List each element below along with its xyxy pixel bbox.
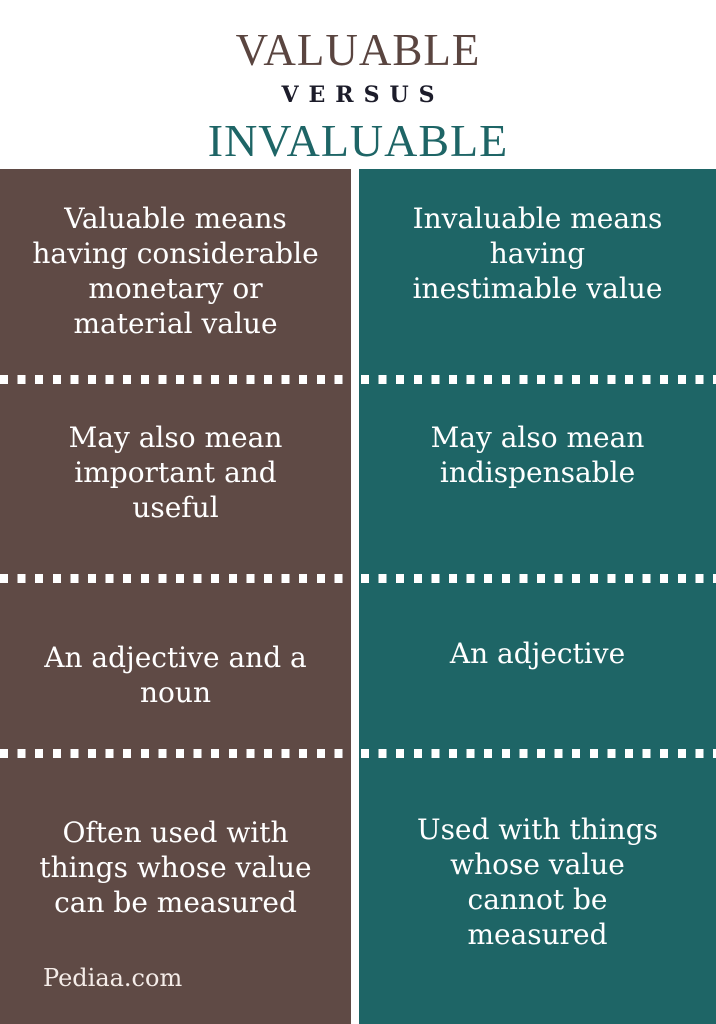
text: definition valuable: monetary or [88, 272, 263, 305]
text: meaning valuable: May also mean [69, 421, 282, 454]
text: definition invaluable [413, 202, 662, 305]
title [208, 25, 508, 166]
text: definition valuable: material value [73, 307, 278, 340]
panel: valuable [0, 169, 351, 1024]
text: usage invaluable: Used with things [417, 813, 658, 846]
text: usage valuable [39, 816, 312, 919]
text: meaning invaluable [431, 421, 644, 489]
divider dots [0, 375, 351, 384]
title: valuable: VALUABLE [236, 25, 480, 75]
text: meaning valuable [69, 421, 282, 524]
text: definition invaluable: Invaluable means [413, 202, 662, 235]
text: meaning invaluable: May also mean [431, 421, 644, 454]
text: usage valuable: Often used with [62, 816, 289, 849]
text: usage invaluable: whose value [450, 848, 625, 881]
text: meaning valuable: important and [74, 456, 277, 489]
title: versus: VERSUS [281, 82, 445, 108]
text: usage invaluable: cannot be [468, 883, 607, 916]
panel: invaluable [359, 169, 716, 1024]
text: definition valuable [32, 202, 319, 340]
text: usage valuable: things whose value [39, 851, 312, 884]
text: part of speech invaluable: An adjective [450, 637, 625, 670]
logo: pediaa: Pediaa.com [43, 964, 182, 992]
text: meaning valuable: useful [132, 491, 219, 524]
text: definition invaluable: inestimable value [413, 272, 662, 305]
title: invaluable: INVALUABLE [208, 115, 508, 166]
text: definition valuable: Valuable means [64, 202, 287, 235]
text: definition valuable: having considerable [32, 237, 319, 270]
text: meaning invaluable: indispensable [440, 456, 635, 489]
text: definition invaluable: having [490, 237, 585, 270]
text: part of speech valuable: noun [140, 676, 211, 709]
text: usage invaluable: measured [467, 918, 608, 951]
text: usage valuable: can be measured [54, 886, 297, 919]
text: usage invaluable [417, 813, 658, 951]
text: part of speech valuable: An adjective and a [44, 641, 307, 674]
text: part of speech valuable [44, 641, 307, 709]
